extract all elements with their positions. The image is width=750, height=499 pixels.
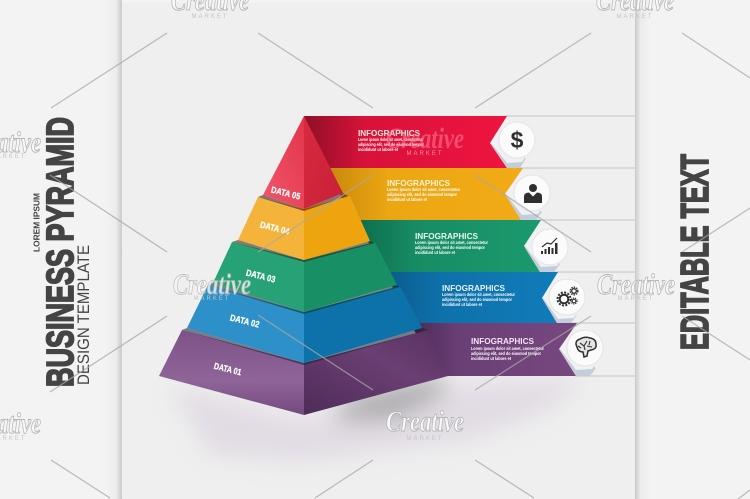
ribbon 4: orange xyxy=(330,168,523,220)
watermarks: MARKET xyxy=(616,14,654,20)
watermarks: MARKET xyxy=(406,151,444,157)
watermarks: MARKET xyxy=(406,436,444,442)
ribbons xyxy=(304,116,577,376)
subheading: design template: DESIGN TEMPLATE xyxy=(75,245,93,385)
tier 05: red: DATA 05 xyxy=(270,185,301,202)
watermarks: Creative xyxy=(386,122,464,155)
ribbon 4: orange: adipiscing elit, sed do eiusmod tempor xyxy=(387,192,457,197)
ribbon 2: blue: adipiscing elit, sed do eiusmod tempor xyxy=(442,297,512,302)
ribbon 3: green: Lorem ipsum dolor sit amet, consectetur xyxy=(415,240,488,245)
watermarks: Creative xyxy=(173,268,251,301)
ribbon 5: red: adipiscing elit, sed do eiusmod tempor xyxy=(358,142,424,147)
ribbon 5: red xyxy=(304,116,507,168)
watermarks: Creative xyxy=(386,405,464,438)
ribbon 3: green: INFOGRAPHICS xyxy=(415,231,478,241)
ribbon 1: purple: Lorem ipsum dolor sit amet, consectetur xyxy=(471,346,544,351)
tier 01: purple: DATA 01 xyxy=(213,361,243,377)
ribbon 3: green: incididunt ut labore et xyxy=(415,250,455,255)
ribbon 3: green xyxy=(360,220,541,272)
tier 04: orange xyxy=(232,196,375,262)
tier 02: blue xyxy=(182,285,428,365)
ribbon 2: blue xyxy=(385,272,558,323)
icon: bar chart xyxy=(524,223,570,272)
floor shadow xyxy=(170,374,585,462)
shelves behind ribbons xyxy=(505,116,635,376)
watermarks: Creative xyxy=(597,268,675,301)
icon: brain xyxy=(559,326,605,376)
watermarks: MARKET xyxy=(617,296,655,302)
tier 02: blue: DATA 02 xyxy=(229,313,260,330)
ribbon 1: purple xyxy=(410,323,577,376)
icon plates xyxy=(490,120,605,376)
ribbon 4: orange: Lorem ipsum dolor sit amet, consectetur xyxy=(387,187,460,192)
tier 05: red xyxy=(258,116,348,211)
icon: dollar: $ xyxy=(511,127,524,153)
icon: gears xyxy=(542,275,587,323)
right heading: editable text: EDITABLE TEXT xyxy=(674,154,717,350)
tier 03: green xyxy=(208,242,400,314)
ribbon 1: purple: incididunt ut labore et xyxy=(471,356,511,361)
ribbon 4: orange: INFOGRAPHICS xyxy=(387,178,450,188)
watermarks: MARKET xyxy=(193,296,231,302)
ribbon 5: red: INFOGRAPHICS xyxy=(358,128,420,138)
ribbon 5: red: Lorem ipsum dolor sit amet, consectetur xyxy=(358,137,423,142)
icon: businessman xyxy=(505,170,552,220)
ribbon 2: blue: incididunt ut labore et xyxy=(442,302,482,307)
icon: dollar xyxy=(490,120,536,168)
label: lorem ipsum: LOREM IPSUM xyxy=(32,193,42,252)
ribbon 5: red: incididunt ut labore et xyxy=(358,147,398,152)
ribbon 2: blue: INFOGRAPHICS xyxy=(442,283,505,293)
tier 04: orange: DATA 04 xyxy=(259,220,290,237)
watermarks: MARKET xyxy=(191,14,229,20)
tier 03: green: DATA 03 xyxy=(245,268,276,285)
heading: business pyramid: BUSINESS PYRAMID xyxy=(40,117,82,387)
ribbon 2: blue: Lorem ipsum dolor sit amet, consectetur xyxy=(442,292,515,297)
pyramid xyxy=(159,116,448,415)
left title block xyxy=(32,117,93,387)
tier 01: purple xyxy=(159,330,448,415)
ribbon 1: purple: adipiscing elit, sed do eiusmod tempor xyxy=(471,351,541,356)
ribbon 3: green: adipiscing elit, sed do eiusmod tempor xyxy=(415,245,485,250)
watermarks xyxy=(0,0,675,442)
ribbon 1: purple: INFOGRAPHICS xyxy=(471,336,534,346)
ribbon 4: orange: incididunt ut labore et xyxy=(387,197,427,202)
